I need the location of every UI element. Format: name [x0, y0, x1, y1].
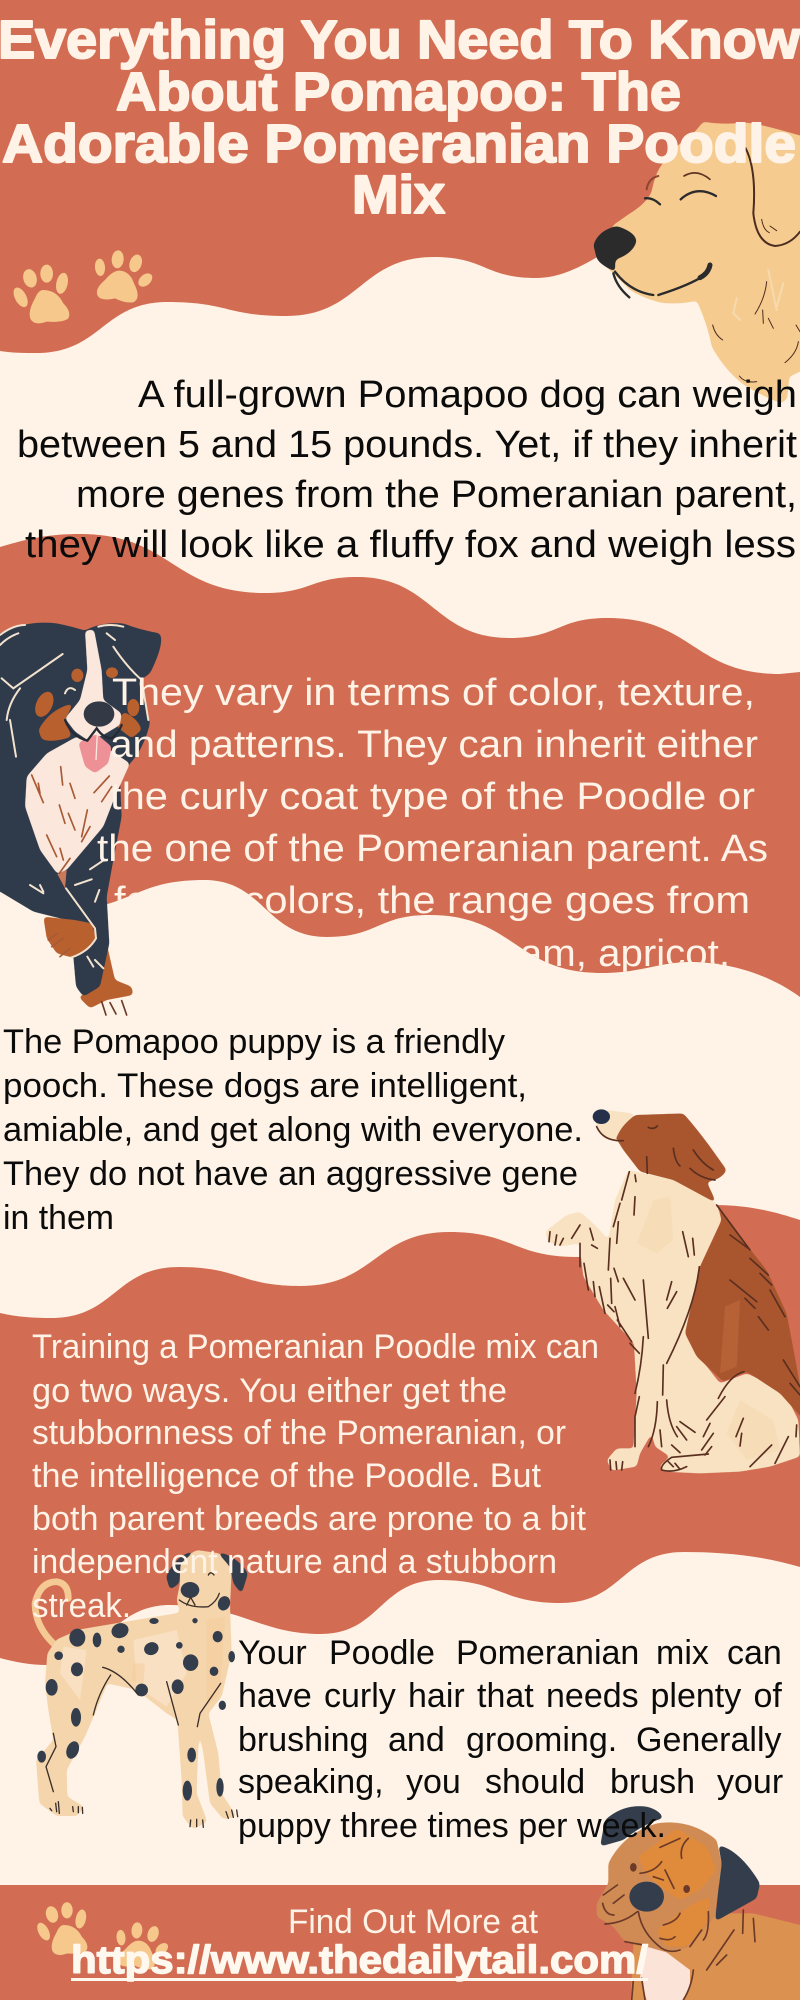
text block: grooming: and	[388, 1721, 445, 1759]
text block: grooming: that	[477, 1677, 534, 1715]
text block: grooming: speaking,	[238, 1763, 384, 1801]
text block: grooming: have	[238, 1677, 312, 1715]
text block: grooming	[238, 1634, 783, 1845]
text block: training: Training a Pomeranian Poodle mix can	[32, 1328, 599, 1366]
text block: coat and colors: white, black, gray, cream, apricot,	[133, 933, 730, 975]
text block: training: independent nature and a stubborn	[32, 1543, 557, 1581]
title: Adorable Pomeranian Poodle	[2, 114, 796, 174]
title: About Pomapoo: The	[116, 62, 681, 122]
text block: training: go two ways. You either get the	[32, 1372, 507, 1410]
text block: grooming: can	[727, 1634, 782, 1672]
icon: golden dog	[593, 122, 800, 403]
footer call to action: https://www.thedailytail.com/	[71, 1939, 648, 1982]
title: Everything You Need To Know	[0, 10, 800, 70]
icon: dalmatian dog	[35, 1550, 248, 1829]
text block: grooming: mix	[656, 1634, 709, 1672]
text block: grooming: needs	[546, 1677, 639, 1715]
icon: bernese dog	[0, 623, 161, 1015]
text block: grooming: Poodle	[329, 1634, 435, 1672]
text block: grooming: grooming.	[466, 1721, 617, 1759]
footer call to action	[71, 1903, 648, 1982]
text block: grooming: should	[485, 1763, 585, 1801]
text block: coat and colors: and patterns. They can inherit either	[110, 724, 758, 766]
text block: training: the intelligence of the Poodle. But	[32, 1457, 542, 1495]
text block: grooming: you	[406, 1763, 461, 1801]
text block: grooming: brushing	[238, 1721, 368, 1759]
text block: grooming: hair	[408, 1677, 465, 1715]
text block: grooming: curly	[324, 1677, 396, 1715]
title: Mix	[352, 165, 445, 225]
text block: training	[32, 1328, 599, 1625]
icon: paw prints top	[11, 250, 155, 323]
icon: paw prints footer	[35, 1902, 170, 1969]
text block: grooming: Your	[238, 1634, 307, 1672]
icon: brown and cream dog	[545, 1109, 800, 1473]
text block: temperament: in them	[3, 1199, 114, 1237]
text block: grooming: Generally	[636, 1721, 782, 1759]
text block: grooming: puppy three times per week.	[238, 1807, 666, 1845]
text block: temperament: They do not have an aggressive gene	[3, 1155, 578, 1193]
text block: temperament: The Pomapoo puppy is a friendly	[3, 1023, 505, 1061]
text block: temperament: pooch. These dogs are intelligent,	[3, 1067, 527, 1105]
text block: training: both parent breeds are prone to a bit	[32, 1500, 587, 1538]
text block: weight: they will look like a fluffy fox and weigh less	[25, 524, 796, 566]
text block: training: streak.	[32, 1587, 131, 1625]
text block: grooming: plenty	[650, 1677, 741, 1715]
text block: temperament: amiable, and get along with everyone.	[3, 1111, 583, 1149]
text block: grooming: brush	[610, 1763, 695, 1801]
text block: weight	[17, 374, 797, 566]
text block: weight: between 5 and 15 pounds. Yet, if they inherit	[17, 424, 797, 466]
icon: boxer dog	[597, 1806, 800, 2000]
text block: weight: A full-grown Pomapoo dog can weigh	[138, 374, 797, 416]
text block: coat and colors	[97, 672, 768, 975]
text block: coat and colors: the one of the Pomeranian parent. As	[97, 828, 768, 870]
header wave background	[0, 0, 800, 353]
footer call to action: Find Out More at	[288, 1903, 539, 1941]
panel: training wave band	[0, 1205, 800, 1665]
title	[0, 10, 800, 225]
panel: coat wave band	[0, 534, 800, 997]
text block: coat and colors: They vary in terms of color, texture,	[112, 672, 755, 714]
text block: grooming: your	[717, 1763, 783, 1801]
text block: training: stubbornness of the Pomeranian, or	[32, 1414, 566, 1452]
text block: coat and colors: the curly coat type of the Poodle or	[110, 776, 755, 818]
text block: temperament	[3, 1023, 583, 1237]
text block: weight: more genes from the Pomeranian parent,	[76, 474, 797, 516]
text block: grooming: of	[754, 1677, 782, 1715]
text block: grooming: Pomeranian	[456, 1634, 639, 1672]
panel: footer band	[0, 1885, 800, 2000]
text block: coat and colors: for the colors, the range goes from	[114, 880, 750, 922]
